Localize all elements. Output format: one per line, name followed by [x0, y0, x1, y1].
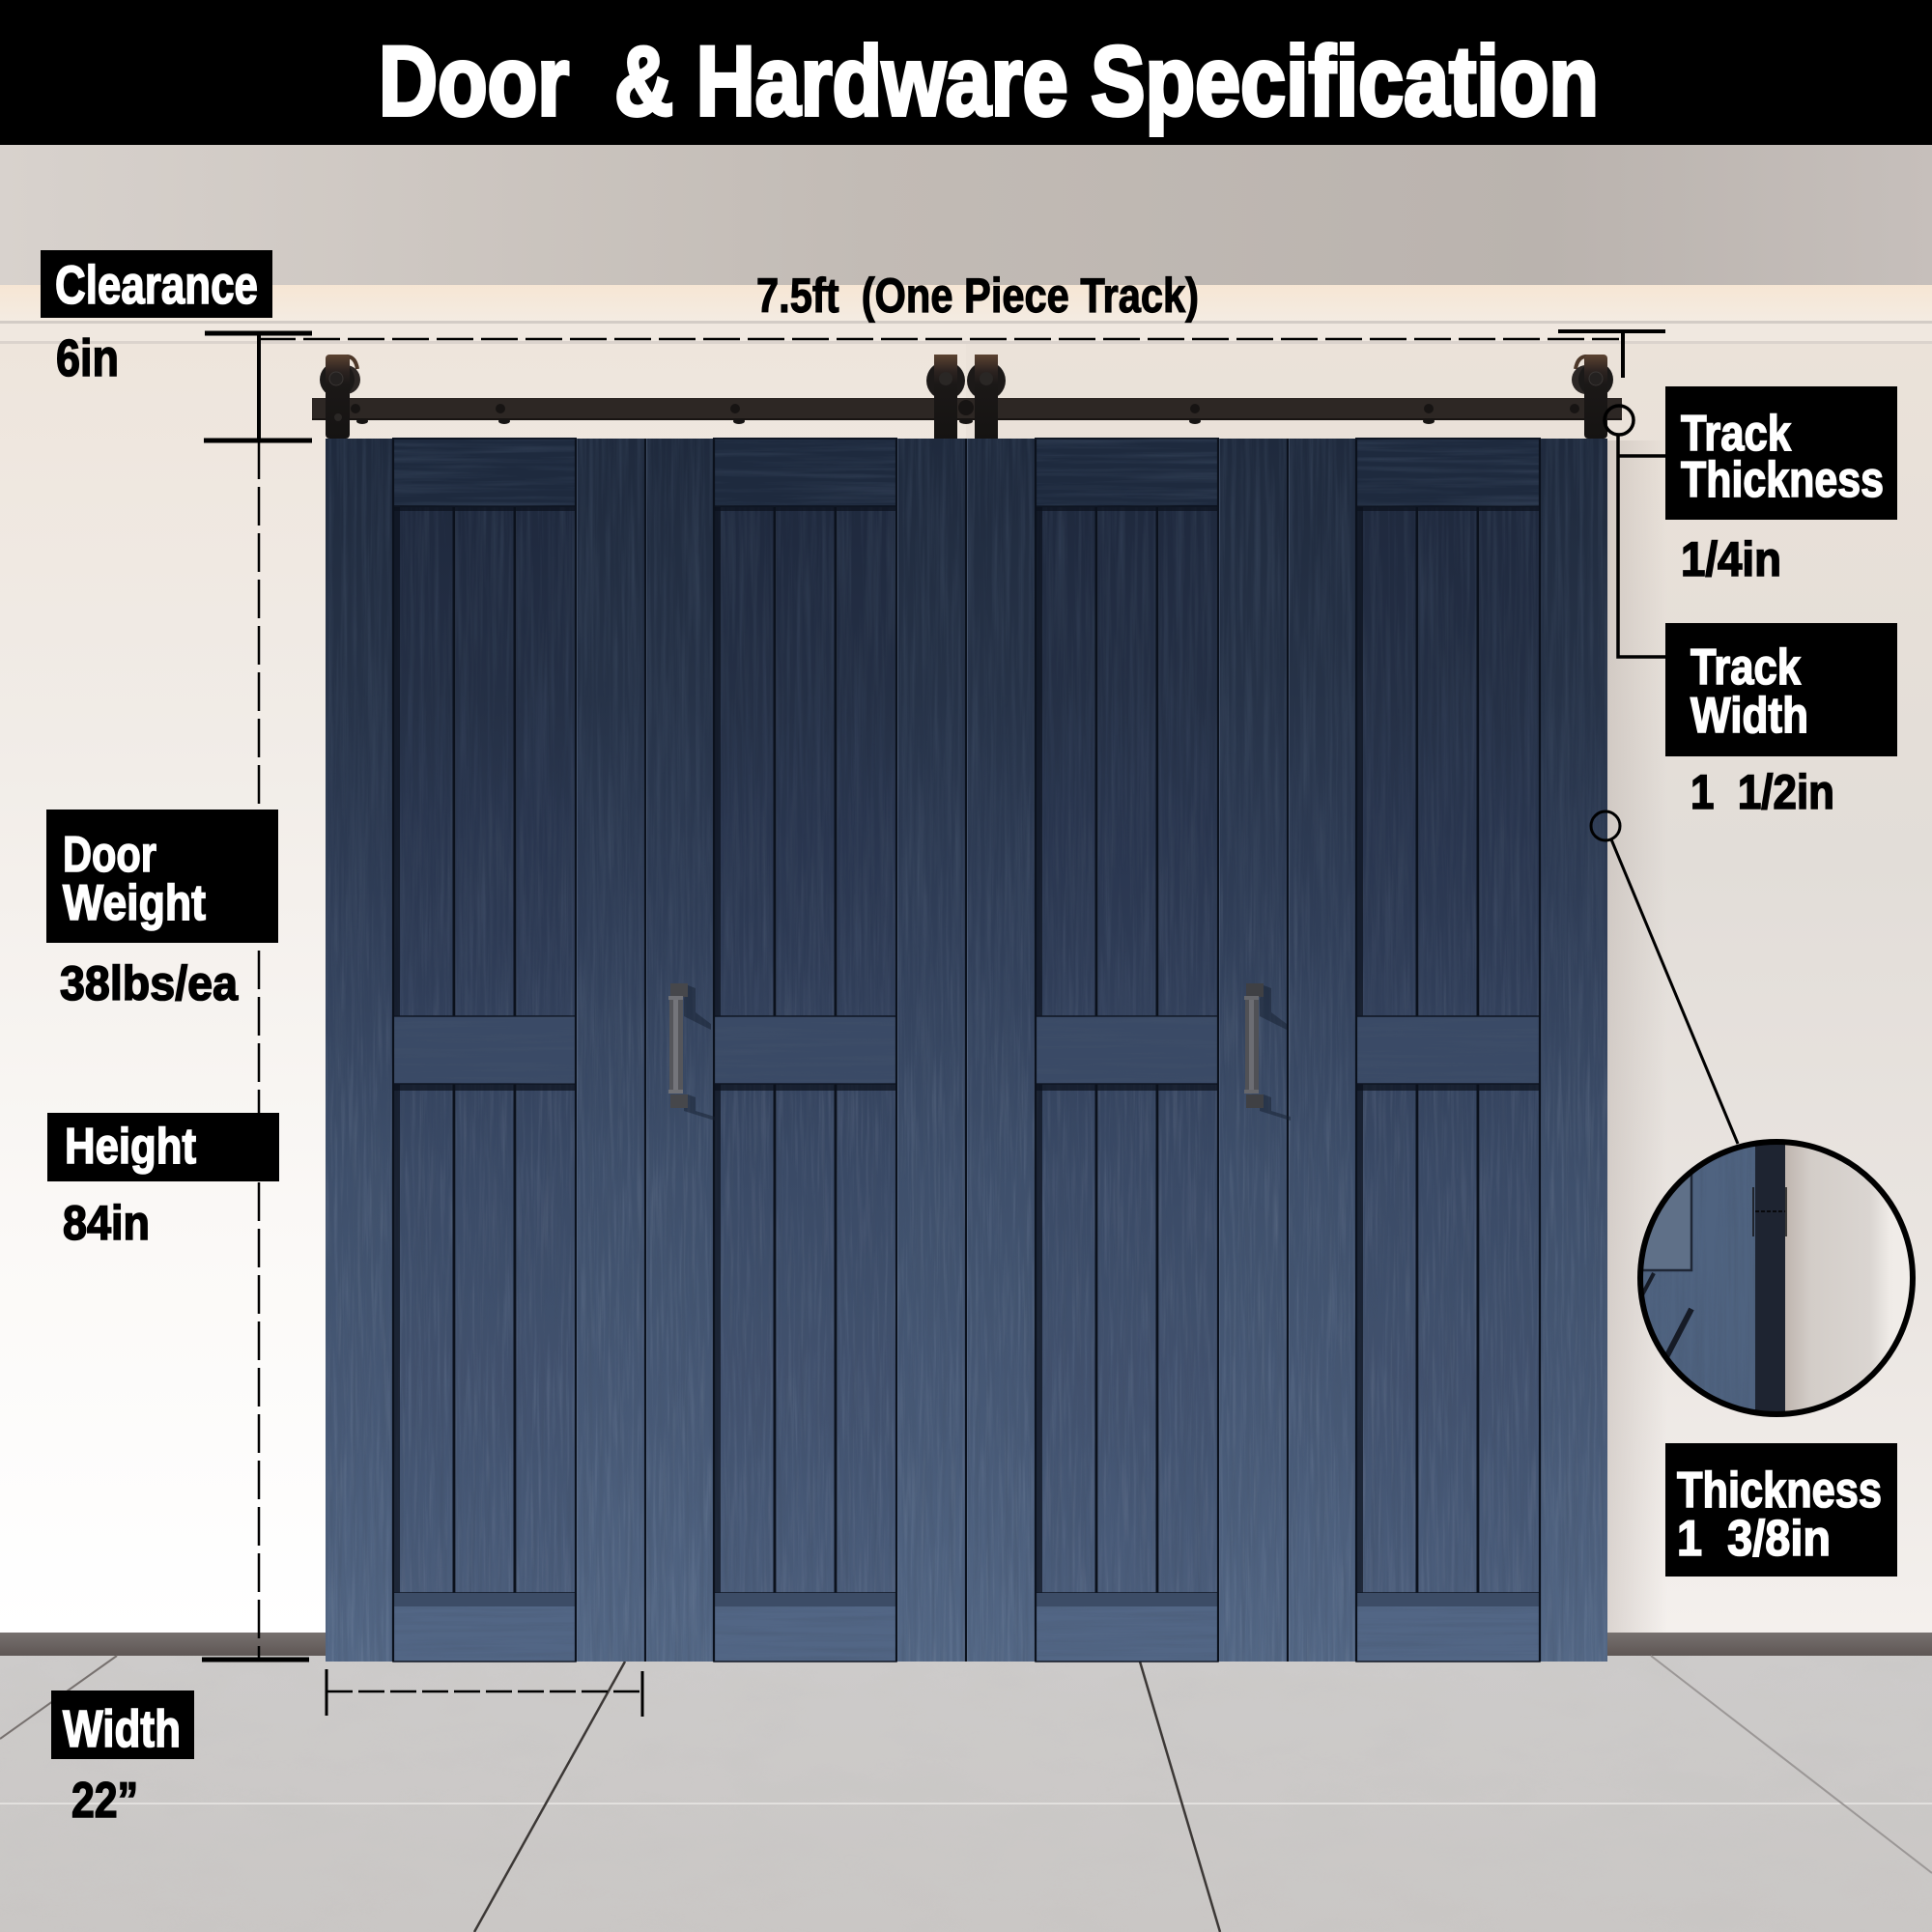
value: height: 84in: [63, 1196, 150, 1250]
icon: door handle right: [1244, 983, 1291, 1121]
dimension: track length: [259, 338, 1619, 340]
dimension: door height: [202, 440, 309, 1660]
track rail: [312, 398, 1622, 424]
icon: door handle left: [668, 983, 715, 1121]
dimension: track end marker: [1558, 331, 1665, 378]
value: clearance 6in: 6in: [56, 329, 119, 387]
label: door thickness: 1 3/8in: [1677, 1511, 1831, 1567]
door 1 panel: [393, 439, 576, 1662]
label: door thickness: Thickness: [1677, 1463, 1882, 1519]
label: track width: Track: [1690, 639, 1801, 696]
callout: door edge magnifier: [1637, 1139, 1916, 1417]
dimension: door width dashes: [327, 1690, 642, 1692]
callout: door thickness leader: [1591, 811, 1738, 1144]
door 2 panel: [714, 439, 896, 1662]
value: track thickness: 1/4in: [1681, 532, 1781, 586]
dimension: clearance: [204, 333, 312, 440]
label: door thickness: [1665, 1443, 1897, 1577]
label: track thickness: Track: [1681, 406, 1791, 462]
label: track width: [1665, 623, 1897, 756]
label: track thickness: Thickness: [1681, 452, 1884, 508]
label: door weight: [46, 810, 278, 943]
callout: track end circle and leaders: [1605, 406, 1665, 657]
icon: roller hanger 3: [967, 355, 1006, 439]
barn doors: [326, 439, 1607, 1662]
label: track width: Width: [1690, 688, 1808, 744]
value: track width: 1 1/2in: [1690, 765, 1834, 819]
value: door weight: 38lbs/ea: [60, 956, 239, 1010]
door 3 panel: [1036, 439, 1218, 1662]
dimension: door width: [327, 1669, 642, 1717]
label: height: Height: [65, 1119, 196, 1175]
label: door weight: Door: [63, 827, 156, 883]
icon: roller hanger 2: [926, 355, 965, 439]
icon: roller hanger 1: [320, 355, 360, 439]
label: height: [47, 1113, 279, 1181]
header band: [0, 0, 1932, 145]
label: clearance: Clearance: [55, 254, 258, 315]
door 4 panel: [1356, 439, 1540, 1662]
value: width: 22”: [71, 1773, 138, 1829]
icon: roller hanger 4: [1572, 355, 1613, 439]
label: width: Width: [63, 1700, 181, 1758]
label: track thickness: [1665, 386, 1897, 520]
label: door weight: Weight: [63, 875, 206, 931]
title: Door & Hardware Specification: [379, 26, 1599, 136]
label: track length: 7.5ft (One Piece Track): [756, 269, 1199, 323]
